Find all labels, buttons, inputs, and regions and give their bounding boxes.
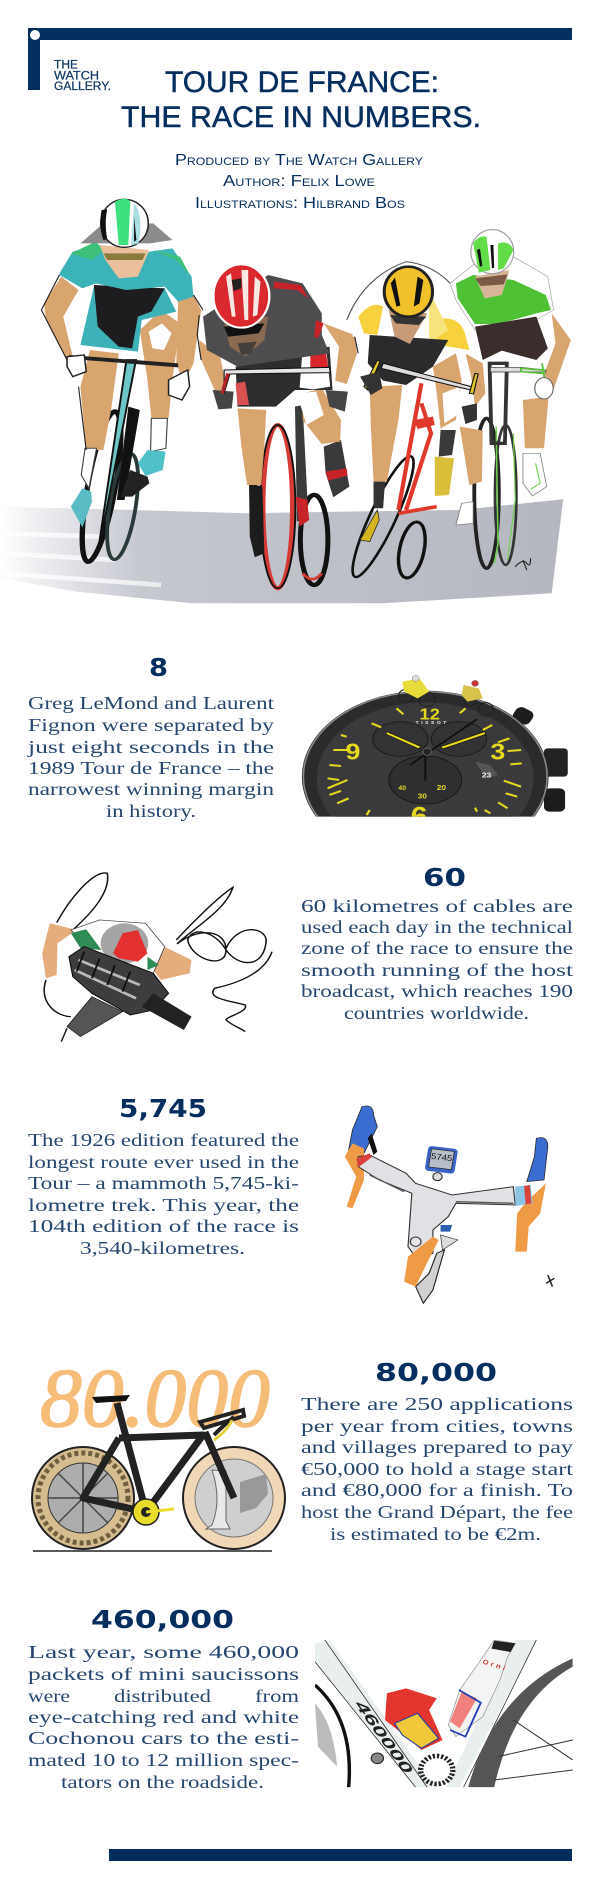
- illustration: handlebars with computer: [345, 1106, 554, 1303]
- bicycle frame: [33, 1395, 272, 1551]
- body text: 60 kilometres of cables are: [301, 896, 573, 916]
- body text: 3,540-kilometres.: [80, 1238, 245, 1258]
- stat: 8 seconds: [27, 653, 274, 821]
- body text: distributed: [114, 1686, 211, 1706]
- watch case and dial: 30: [418, 792, 428, 800]
- cables: [44, 873, 272, 1032]
- crown and pushers: [510, 705, 568, 812]
- body text: just eight seconds in the: [27, 737, 274, 757]
- body text: 104th edition of the race is: [28, 1216, 299, 1236]
- body text: used each day in the technical: [301, 917, 573, 937]
- credits: Illustrations: Hilbrand Bos: [195, 195, 405, 212]
- rider 2: red and black: [197, 264, 358, 588]
- body text: smooth running of the host: [301, 960, 573, 980]
- body text: in history.: [106, 801, 196, 821]
- brushed number: 80.000: [40, 1352, 270, 1445]
- chainring: [421, 1756, 453, 1784]
- illustration: watch with two tiny cyclists: [302, 675, 568, 817]
- credits: Produced by The Watch Gallery: [175, 152, 424, 169]
- body text: and villages prepared to pay: [301, 1437, 573, 1457]
- logo: The Watch Gallery: GALLERY.: [54, 81, 111, 93]
- number: 5,745: [119, 1094, 207, 1123]
- stat: 5,745 km: [28, 1094, 299, 1258]
- body text: narrowest winning margin: [28, 779, 274, 799]
- body text: Greg LeMond and Laurent: [28, 693, 274, 713]
- body text: Fignon were separated by: [28, 715, 274, 735]
- body text: and €80,000 for a finish. To: [301, 1480, 573, 1500]
- credits: Author: Felix Lowe: [223, 173, 375, 190]
- body text: zone of the race to ensure the: [301, 938, 573, 958]
- two euro coin wheel: [32, 1447, 134, 1549]
- logo: The Watch Gallery: [54, 60, 111, 93]
- water bottle: [448, 1640, 515, 1737]
- silver bar: [358, 1155, 515, 1260]
- number: 460,000: [91, 1605, 234, 1634]
- frame: top and left bar with dot: [28, 28, 572, 90]
- body text: Last year, some 460,000: [28, 1642, 299, 1662]
- body text: There are 250 applications: [301, 1394, 573, 1414]
- body text: countries worldwide.: [344, 1003, 529, 1023]
- body text: broadcast, which reaches 190: [301, 981, 573, 1001]
- body text: Tour – a mammoth 5,745-ki-: [28, 1173, 299, 1193]
- wheel arcs: [315, 1685, 349, 1787]
- body text: Cochonou cars to the esti-: [28, 1728, 299, 1748]
- road: [0, 499, 563, 603]
- cycling computer: [425, 1146, 458, 1181]
- watch case and dial: [302, 690, 549, 817]
- body text: lometre trek. This year, the: [28, 1195, 299, 1215]
- title: TOUR DE FRANCE:: [165, 66, 439, 99]
- body text: packets of mini saucissons: [28, 1664, 299, 1684]
- watch case and dial: 20: [437, 783, 447, 792]
- frame number: 460000: [351, 1697, 416, 1777]
- body text: [28, 1642, 299, 1792]
- watch case and dial: 3: [490, 739, 505, 765]
- signature: [546, 1275, 554, 1287]
- blue hoods and orange drops: [345, 1106, 548, 1252]
- credits: [175, 152, 424, 212]
- cycling computer: 5745: [430, 1151, 453, 1163]
- rider 4: green: [450, 230, 571, 568]
- one euro coin wheel: [183, 1447, 285, 1549]
- body text: eye-catching red and white: [28, 1707, 299, 1727]
- rider arms: [42, 923, 192, 980]
- body text: [27, 693, 274, 821]
- rider 3: yellow: [343, 262, 485, 581]
- rider 1: teal: [41, 199, 203, 564]
- illustration: cameraman with cables: [42, 873, 272, 1042]
- body text: mated 10 to 12 million spec-: [28, 1750, 299, 1770]
- title: THE RACE IN NUMBERS.: [121, 101, 481, 134]
- body text: is estimated to be €2m.: [330, 1524, 541, 1544]
- logo: The Watch Gallery: WATCH: [54, 70, 99, 82]
- jersey and helmet: [71, 920, 165, 973]
- stem and fork: [416, 1250, 444, 1303]
- body text: host the Grand Départ, the fee: [301, 1502, 573, 1522]
- illustration: four sprinters on the road: [0, 199, 571, 603]
- watch case and dial: TISSOT: [416, 720, 446, 725]
- watch case and dial: 6: [411, 802, 428, 832]
- title: [121, 66, 481, 134]
- illustration: bike on euro coins with brush 80.000: [32, 1352, 285, 1551]
- body text: €50,000 to hold a stage start: [301, 1459, 573, 1479]
- illustration: frame, bottle and saucisson packet: Orni: [481, 1658, 506, 1672]
- saucisson packet: [385, 1688, 442, 1750]
- number: 80,000: [375, 1358, 497, 1387]
- body text: tators on the roadside.: [61, 1772, 264, 1792]
- body text: [301, 1394, 573, 1544]
- watch case and dial: 40: [398, 785, 407, 792]
- watch case and dial: 12: [419, 704, 440, 723]
- watch case and dial: 23: [482, 771, 492, 779]
- tiny cyclists: [398, 675, 493, 716]
- body text: per year from cities, towns: [301, 1416, 573, 1436]
- body text: longest route ever used in the: [28, 1152, 299, 1172]
- body text: [301, 896, 573, 1023]
- number: 8: [149, 653, 168, 682]
- stat: 460,000 packets: [28, 1605, 299, 1792]
- video camera: [61, 947, 192, 1042]
- number: 60: [423, 863, 466, 892]
- body text: The 1926 edition featured the: [28, 1130, 299, 1150]
- body text: from: [255, 1686, 299, 1706]
- body text: 1989 Tour de France – the: [28, 758, 274, 778]
- body text: were: [28, 1686, 70, 1706]
- body text: [28, 1130, 299, 1258]
- frame tubes: [315, 1640, 536, 1787]
- watch case and dial: 9: [346, 739, 360, 765]
- stat: 80,000 euros: [301, 1358, 573, 1544]
- footer bar: [109, 1849, 572, 1861]
- artist signature: [515, 558, 531, 570]
- logo: The Watch Gallery: THE: [54, 60, 78, 72]
- illustration: frame, bottle and saucisson packet: [315, 1640, 573, 1787]
- stat: 60 kilometres: [301, 863, 573, 1023]
